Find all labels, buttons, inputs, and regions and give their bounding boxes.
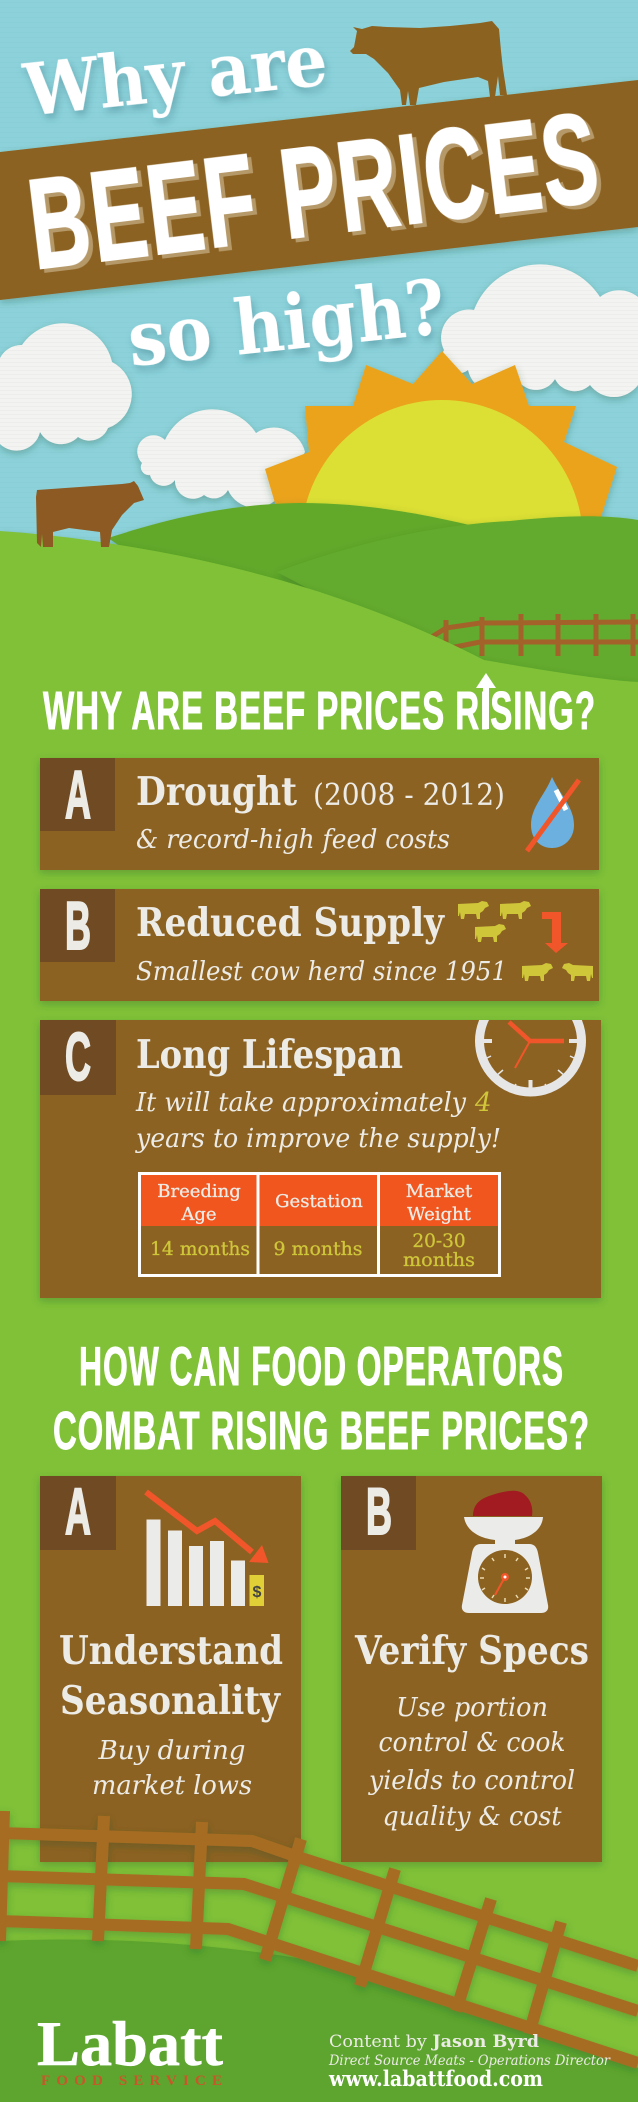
label A: A bbox=[65, 1474, 91, 1548]
label A bbox=[40, 1474, 116, 1550]
icon: three cows bbox=[458, 901, 531, 942]
column: gestation: Gestation bbox=[275, 1191, 363, 1212]
panel: A drought bbox=[40, 757, 599, 870]
text: portion control: control & cook bbox=[378, 1728, 566, 1758]
heading: Long Lifespan: Long Lifespan bbox=[136, 1032, 403, 1078]
subtext: Smallest cow herd since 1951 bbox=[136, 957, 507, 987]
logo: Labatt Food Service: Labatt bbox=[37, 2008, 224, 2079]
label B: B bbox=[366, 1474, 392, 1548]
label A: A bbox=[65, 757, 91, 833]
heading: understand seasonality bbox=[59, 1628, 283, 1724]
text: buy during market lows bbox=[92, 1736, 252, 1801]
subtext line 2: years to improve the supply! bbox=[135, 1124, 501, 1154]
cloud: middle bbox=[137, 409, 305, 508]
icon: cow on hill bbox=[36, 481, 144, 547]
column: market weight: Market bbox=[406, 1181, 473, 1202]
table grid bbox=[140, 1174, 500, 1276]
hill: front left bbox=[0, 531, 638, 2102]
dates: (2008 - 2012) bbox=[313, 778, 505, 813]
label A bbox=[40, 757, 115, 833]
column: market weight: 20-30 bbox=[412, 1231, 466, 1252]
icon: down arrow bbox=[542, 912, 568, 953]
credits bbox=[328, 2032, 611, 2091]
heading: how can food operators bbox=[53, 1335, 590, 1461]
sky bbox=[0, 0, 638, 560]
icon: dollar box bbox=[250, 1575, 264, 1606]
column: breeding age bbox=[150, 1181, 250, 1260]
panel: C long lifespan bbox=[40, 990, 601, 1298]
icon: rising arrow bbox=[476, 673, 496, 729]
column: breeding age: Breeding bbox=[157, 1181, 241, 1202]
cloud: right bbox=[441, 264, 638, 397]
heading: understand seasonality: Seasonality bbox=[60, 1678, 281, 1724]
icon: scale with meat bbox=[462, 1491, 548, 1613]
banner band bbox=[0, 80, 638, 300]
credits: Content by Jason Byrd bbox=[329, 2032, 539, 2052]
text: buy during market lows: market lows bbox=[92, 1771, 252, 1801]
label C bbox=[40, 1019, 116, 1095]
text: portion control: quality & cost bbox=[382, 1802, 562, 1832]
hill: footer bbox=[0, 1939, 638, 2102]
icon: clock bbox=[475, 1020, 586, 1096]
text: portion control bbox=[368, 1693, 575, 1832]
icon: sun bbox=[265, 351, 617, 682]
column: gestation bbox=[274, 1191, 363, 1260]
text: portion control: Use portion bbox=[396, 1693, 548, 1723]
fence posts bbox=[0, 1811, 561, 2034]
column: market weight: Weight bbox=[407, 1204, 472, 1225]
column: market weight bbox=[403, 1181, 475, 1271]
bar chart bbox=[146, 1520, 245, 1606]
label B: B bbox=[65, 888, 91, 964]
column: gestation: 9 months bbox=[274, 1239, 362, 1260]
icon: dollar box: $ bbox=[253, 1584, 262, 1601]
subtext: & record-high feed costs bbox=[136, 825, 450, 855]
icon: crossed water drop bbox=[527, 777, 579, 851]
icon: cow on banner bbox=[350, 21, 507, 105]
fence: top right bbox=[427, 614, 638, 656]
column: market weight: months bbox=[403, 1250, 475, 1271]
logo: Labatt Food Service: FOOD SERVICE bbox=[41, 2073, 222, 2089]
credits: www.labattfood.com bbox=[328, 2066, 543, 2091]
heading: Reduced Supply: Reduced Supply bbox=[136, 900, 445, 946]
title banner bbox=[0, 21, 638, 300]
heading: understand seasonality: Understand bbox=[59, 1628, 283, 1674]
table: timeline bbox=[140, 1174, 500, 1276]
sun disc bbox=[301, 400, 583, 682]
column: breeding age: 14 months bbox=[150, 1239, 250, 1260]
hill: back dark bbox=[108, 503, 520, 600]
number 4: 4 bbox=[474, 1088, 492, 1118]
label B bbox=[341, 1474, 416, 1550]
cloud: left bbox=[0, 323, 132, 451]
panel: B reduced supply bbox=[40, 888, 599, 1001]
panel: A seasonality bbox=[40, 1474, 301, 1862]
sun rays bbox=[265, 351, 617, 520]
column: breeding age: Age bbox=[180, 1204, 217, 1225]
table header bbox=[140, 1174, 500, 1226]
fence rails bbox=[0, 1833, 638, 2063]
panel: B verify specs bbox=[341, 1474, 602, 1862]
title: so high?: so high? bbox=[124, 262, 449, 384]
fence: bottom bbox=[0, 1811, 638, 2063]
icon: two cows bbox=[522, 963, 593, 981]
heading: verify specs: Verify Specs bbox=[354, 1628, 589, 1674]
subtext: It will take approximately bbox=[135, 1088, 466, 1118]
label C: C bbox=[65, 1019, 91, 1095]
hill: right bbox=[277, 516, 638, 690]
text: portion control: yields to control bbox=[368, 1766, 575, 1796]
arrow: falling bbox=[146, 1492, 268, 1563]
credits: Direct Source Meats - Operations Director bbox=[328, 2053, 611, 2069]
heading: Drought: Drought bbox=[136, 769, 297, 815]
title: Why are: Why are bbox=[19, 17, 331, 133]
label B bbox=[40, 888, 115, 964]
text: buy during market lows: Buy during bbox=[97, 1736, 246, 1766]
